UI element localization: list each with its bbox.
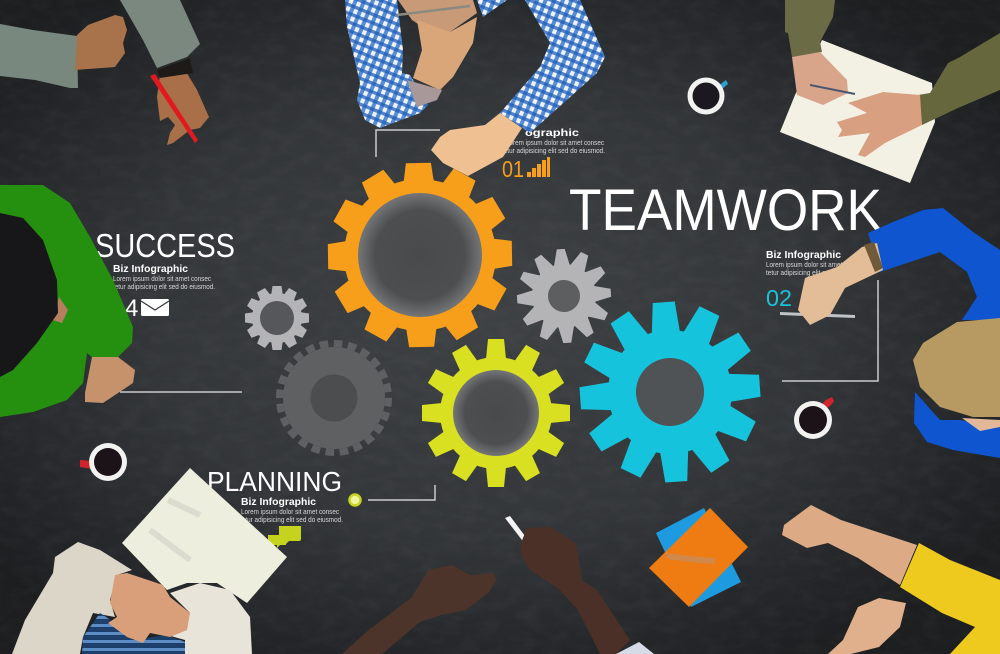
block: infographic 01: 01 (502, 156, 524, 182)
gear: yellow-green (422, 339, 570, 487)
block: infographic 02: Biz Infographic (766, 249, 841, 261)
block: success (95, 227, 235, 322)
connector lines (120, 130, 878, 500)
person: top centre in check shirt (345, 0, 605, 176)
cup: top (688, 78, 728, 114)
block: success: tetur adipisicing elit sed do eiusmod. (113, 282, 215, 291)
block: success: SUCCESS (95, 227, 235, 264)
block: success: Biz Infographic (113, 263, 188, 275)
gear: light grey medium (514, 246, 614, 346)
block: infographic 01: tetur adipisicing elit sed do eiusmod. (502, 146, 605, 155)
icon: envelope (141, 299, 169, 316)
icon: speech bubbles (268, 526, 301, 548)
person: left in green (0, 185, 135, 417)
block: planning: PLANNING (207, 466, 342, 497)
block: planning: Lorem ipsum dolor sit amet consec (241, 507, 339, 516)
person: top right with notebook (780, 0, 1000, 183)
cup: left (80, 443, 127, 481)
marker: yellow dot (350, 494, 360, 506)
block: success: Lorem ipsum dolor sit amet consec (113, 274, 211, 283)
gear: cyan large (574, 296, 766, 488)
block: infographic 01: Lorem ipsum dolor sit amet consec (506, 138, 604, 147)
cup: right (794, 397, 834, 439)
block: planning: tetur adipisicing elit sed do eiusmod. (240, 515, 343, 524)
icon: bar signal (527, 157, 550, 177)
block: success: 4 (125, 295, 138, 322)
title: TEAMWORK: TEAMWORK (569, 178, 882, 243)
block: infographic 01 (502, 127, 605, 182)
block: infographic 02: tetur adipisicing elit sed do eiusmod. (766, 268, 869, 277)
block: planning (207, 466, 360, 548)
person: bottom right in yellow (782, 505, 1000, 654)
gear: dark grey (280, 344, 388, 452)
block: infographic 01: ographic (525, 127, 579, 139)
gear: small light grey (245, 286, 309, 350)
person: right with pen (780, 208, 1000, 325)
person: right blonde (913, 318, 1000, 458)
person: top left (0, 0, 209, 145)
books and glasses (649, 508, 748, 607)
block: infographic 02 (766, 249, 869, 311)
gear: orange large (326, 161, 514, 349)
person: bottom left with notebook (12, 468, 287, 654)
block: infographic 02: 02 (766, 285, 792, 311)
block: planning: Biz Infographic (241, 496, 316, 508)
person: bottom centre hands and chalk (342, 516, 654, 654)
block: infographic 02: Lorem ipsum dolor sit amet consec (766, 260, 864, 269)
